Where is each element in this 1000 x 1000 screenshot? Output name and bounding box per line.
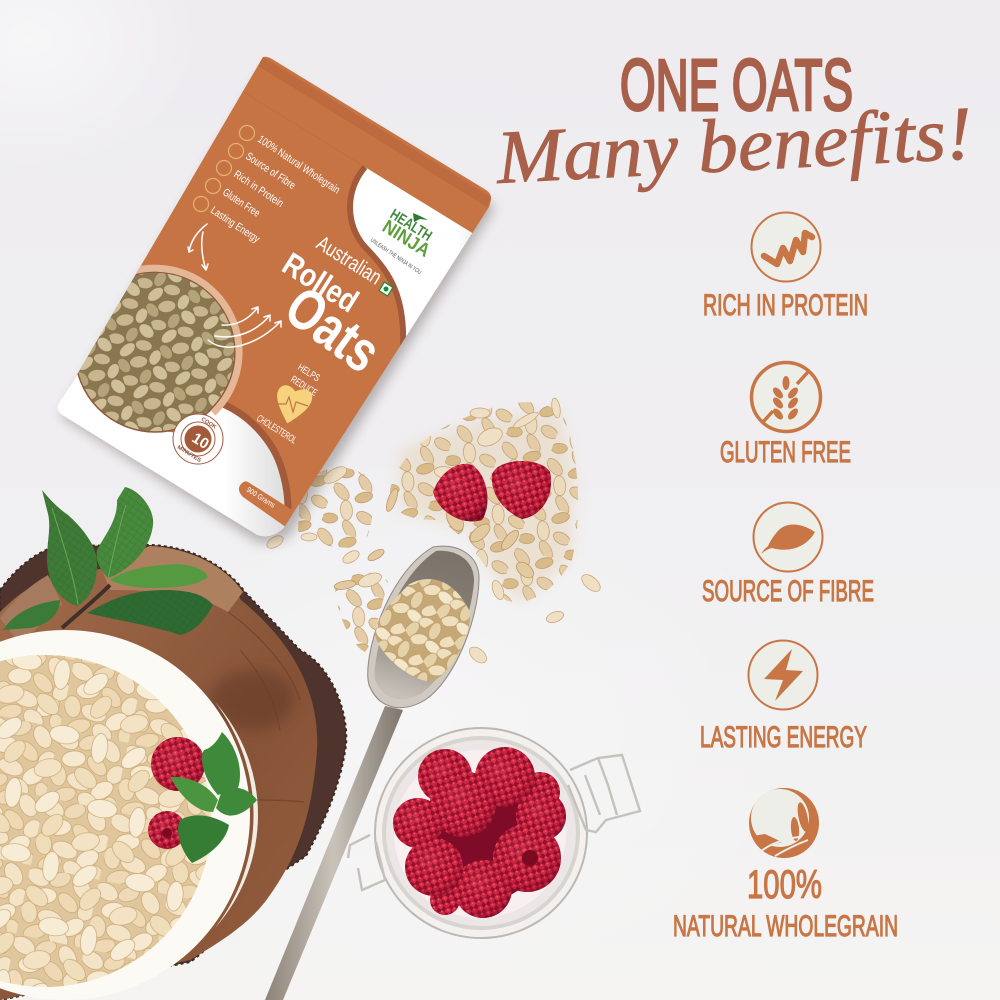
brand logo: [369, 206, 435, 296]
title: Many benefits!: [493, 91, 974, 200]
product name: Oats: [273, 274, 392, 385]
raspberry jar: [348, 728, 640, 938]
weight tag: 900 Grams: [245, 485, 277, 510]
brand logo: UNLEASH THE NINJA IN YOU: [369, 238, 422, 276]
cook time badge: 10: [189, 430, 212, 453]
product name: Rolled: [276, 245, 365, 319]
cereal bowl: [0, 630, 258, 1000]
benefit list: 100% Natural Wholegrain: [255, 133, 342, 196]
bottom white panel: [57, 372, 292, 537]
title: [493, 46, 974, 200]
cook time badge: [173, 414, 223, 464]
benefit: lasting energy: [700, 640, 867, 754]
top right white panel: [347, 165, 472, 345]
cook time badge: MINUTES: [176, 445, 202, 464]
benefit: natural wholegrain: 100%: [747, 863, 822, 907]
raspberries on the table: [433, 461, 551, 521]
heart badge: CHOLESTEROL: [254, 413, 299, 447]
cook time badge: COOK: [200, 417, 217, 430]
benefit list: Lasting Energy: [208, 204, 262, 246]
scattered oats: [265, 397, 603, 666]
benefit: natural wholegrain: [673, 788, 898, 943]
title: ONE OATS: [620, 46, 853, 126]
heart badge: HELPS: [295, 362, 322, 384]
benefit: gluten free: GLUTEN FREE: [720, 436, 851, 469]
oats in spoon: [375, 579, 470, 682]
wood board: [0, 545, 346, 1000]
brand logo: HEALTH: [387, 206, 435, 245]
benefit: rich in protein: RICH IN PROTEIN: [703, 289, 868, 322]
pouch shadow: [61, 66, 495, 544]
weight tag: [238, 481, 294, 526]
heart badge: REDUCE: [288, 374, 319, 399]
mint sprig: [3, 487, 213, 635]
benefit list: Source of Fibre: [243, 150, 297, 192]
oat window: [75, 268, 239, 432]
product name: [282, 237, 380, 370]
brand logo: NINJA: [378, 216, 434, 262]
benefit: rich in protein: [703, 212, 868, 322]
spoon: [265, 546, 479, 1000]
product pouch: [57, 56, 492, 537]
oats in bowl: [0, 655, 211, 987]
heart badge: [257, 364, 320, 444]
benefit: source of fibre: SOURCE OF FIBRE: [702, 575, 874, 608]
bowl garnish: raspberries and mint: [148, 732, 257, 863]
jar clasps: [348, 755, 640, 890]
arrows: [188, 224, 281, 347]
benefit: gluten free: [720, 362, 851, 469]
benefit: lasting energy: LASTING ENERGY: [700, 721, 867, 754]
benefit list: Rich in Protein: [231, 168, 285, 210]
product name: Australian: [312, 232, 386, 289]
benefit list: [194, 126, 342, 246]
benefit: source of fibre: [702, 502, 874, 608]
benefit list: Gluten Free: [220, 186, 262, 220]
